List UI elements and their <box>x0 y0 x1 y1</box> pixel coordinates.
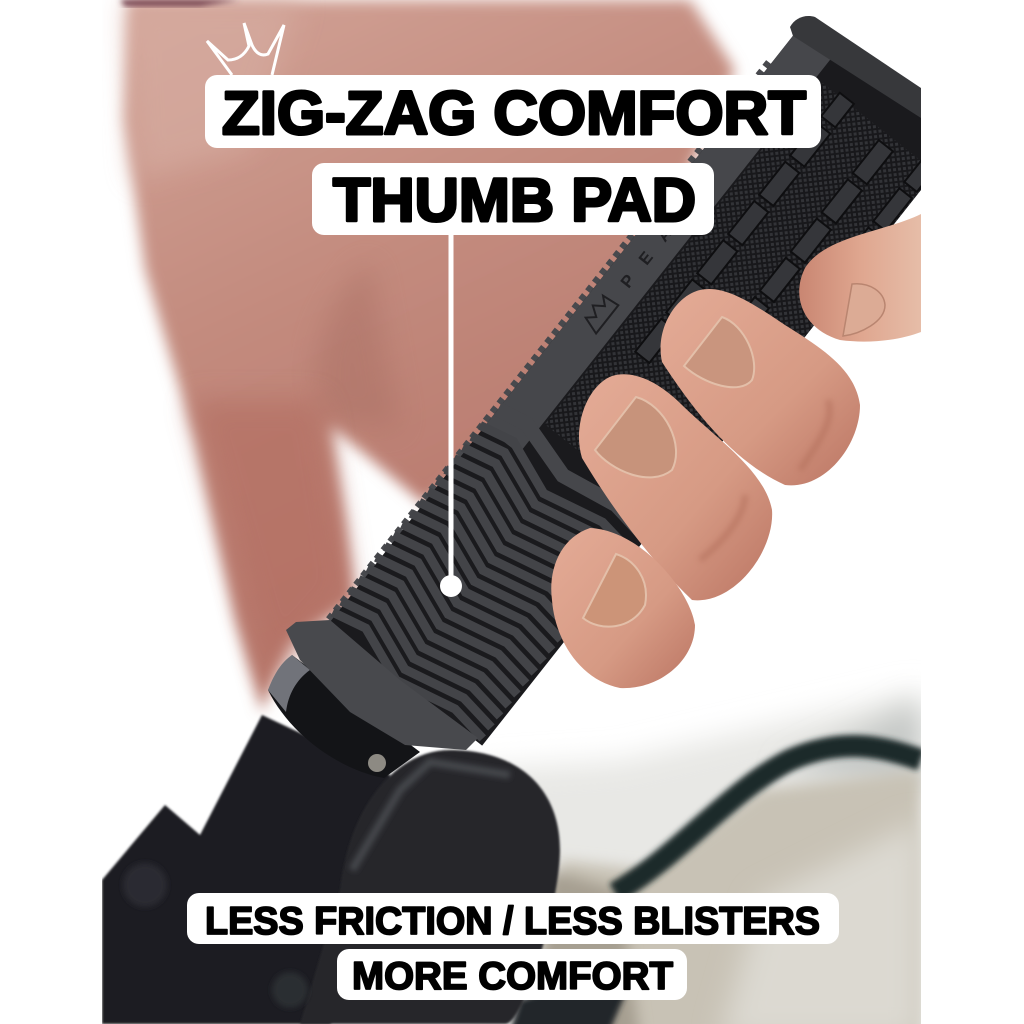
lower grip flange <box>286 620 478 750</box>
nail 3 <box>684 317 754 387</box>
title line 1: ZIG-ZAG COMFORT <box>222 79 806 147</box>
pointer line to thumb pad <box>440 230 462 597</box>
knuckle shadow 3 <box>800 400 830 470</box>
raised blocks <box>634 92 921 364</box>
nail 2 <box>595 397 676 477</box>
smooth logo strip <box>485 22 838 454</box>
pad border chevron <box>498 403 636 536</box>
finger 1 <box>551 528 695 688</box>
knurled pad <box>546 82 921 452</box>
blurred background: bike frame and floor <box>470 690 921 1024</box>
finger 2 <box>579 374 772 600</box>
title line 2: THUMB PAD <box>333 166 696 234</box>
blurred hand behind the grip <box>120 0 735 712</box>
zig-zag ridges <box>324 419 639 745</box>
finger 3 <box>661 289 860 485</box>
grip core <box>328 24 956 746</box>
benefit line 1: LESS FRICTION / LESS BLISTERS <box>205 900 820 943</box>
logo wordmark: PEAKS <box>617 163 724 292</box>
nail 1 <box>583 554 646 627</box>
serrated edge teeth <box>329 59 772 620</box>
knuckle shadow 2 <box>700 495 745 560</box>
logo crown mark <box>580 293 618 334</box>
nail 4 <box>843 284 885 336</box>
crown logo <box>207 23 284 75</box>
handlebar and brake lever <box>102 655 560 1024</box>
finger 4 <box>799 214 921 342</box>
top end flange <box>790 16 921 118</box>
benefit line 2: MORE COMFORT <box>352 955 673 998</box>
grip body <box>324 20 958 747</box>
